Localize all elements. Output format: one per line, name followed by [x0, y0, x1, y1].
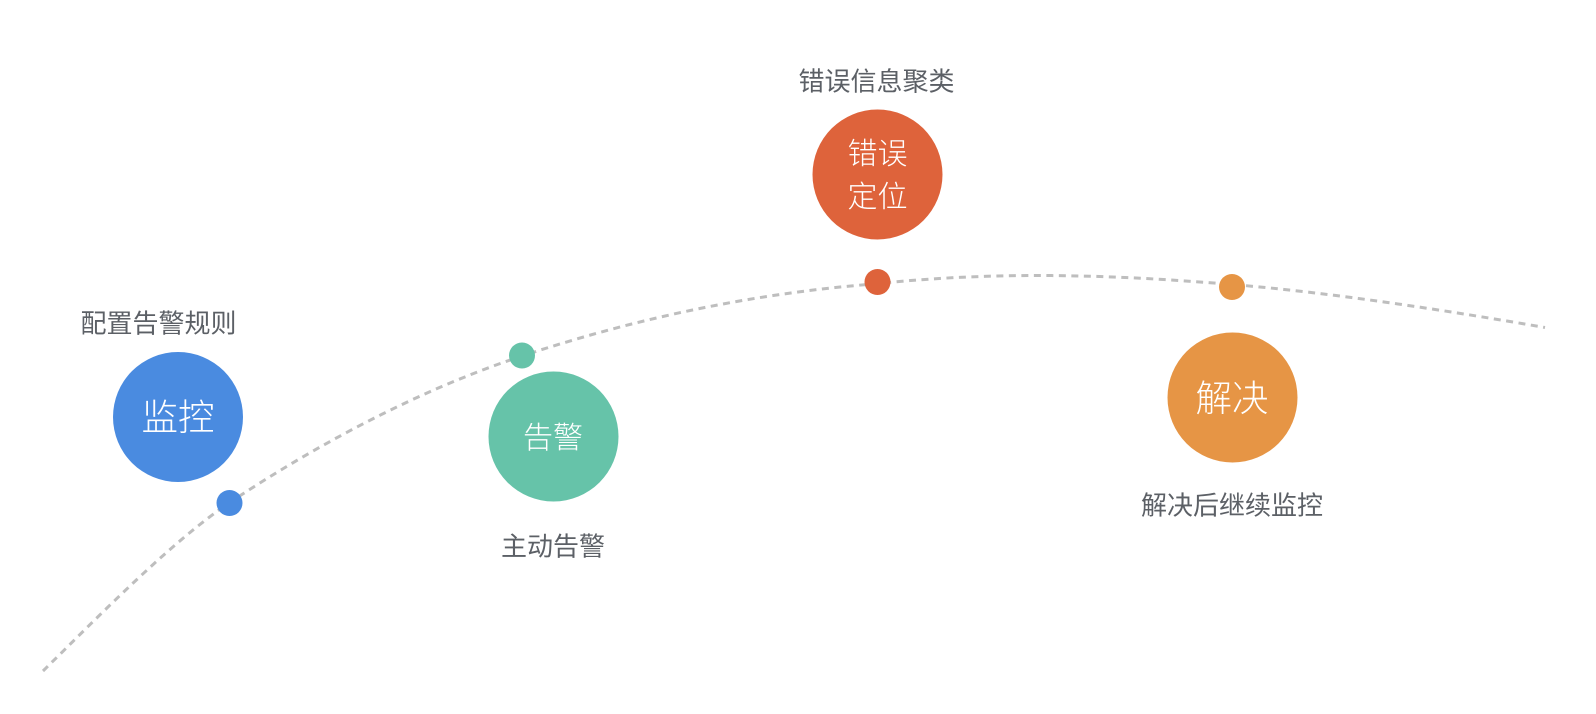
circle: alert: [488, 372, 618, 502]
circle: monitoring: [113, 352, 243, 482]
dot: alert: [509, 342, 535, 368]
step: resolve: [1141, 274, 1323, 520]
circle: resolve: [1168, 332, 1298, 462]
step: monitoring: [80, 308, 243, 516]
caption: resolve: 解决后继续监控: [1141, 490, 1323, 520]
circle label: locate errors: 定位: [848, 181, 908, 214]
caption: locate errors: 错误信息聚类: [798, 66, 955, 96]
circle label: resolve: 解决: [1196, 378, 1268, 419]
dot: monitoring: [216, 490, 242, 516]
dot: locate errors: [864, 269, 890, 295]
circle: locate errors: [812, 110, 942, 240]
caption: monitoring: 配置告警规则: [80, 308, 237, 338]
circle label: locate errors: 错误: [848, 138, 908, 171]
dashed curve: [43, 276, 1545, 671]
caption: alert: 主动告警: [501, 532, 605, 562]
step: locate errors: [798, 66, 955, 295]
circle label: alert: 告警: [523, 422, 583, 455]
circle label: monitoring: 监控: [142, 397, 214, 438]
dot: resolve: [1219, 274, 1245, 300]
step: alert: [488, 342, 618, 562]
